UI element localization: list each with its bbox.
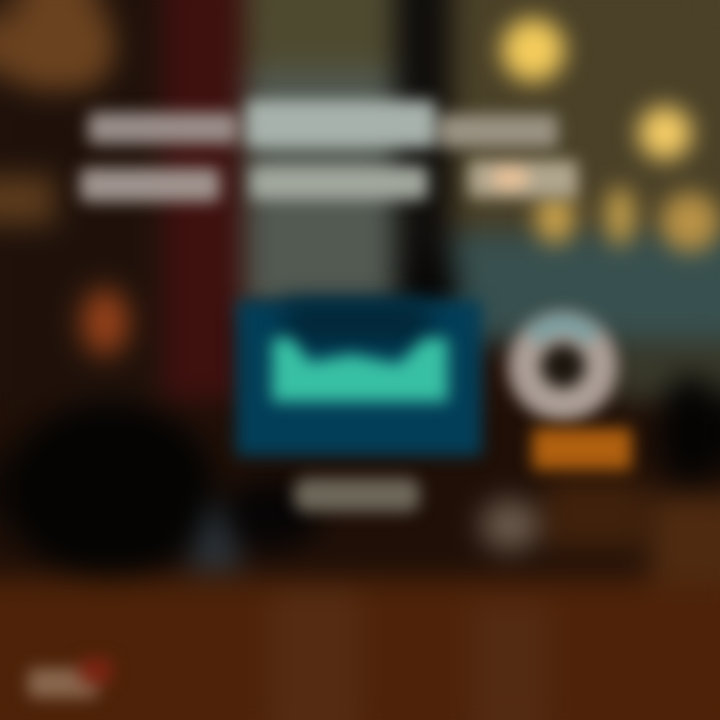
heading: first line, illegible bars <box>88 100 558 148</box>
panel caption bar <box>294 478 420 512</box>
panel chart shape <box>272 338 448 402</box>
bottom-left logo <box>28 658 112 698</box>
orange label <box>532 428 632 470</box>
heading: second line, illegible bars <box>80 160 578 202</box>
ring icon <box>525 324 601 404</box>
teal panel <box>236 300 482 456</box>
ceiling lights <box>501 18 720 252</box>
